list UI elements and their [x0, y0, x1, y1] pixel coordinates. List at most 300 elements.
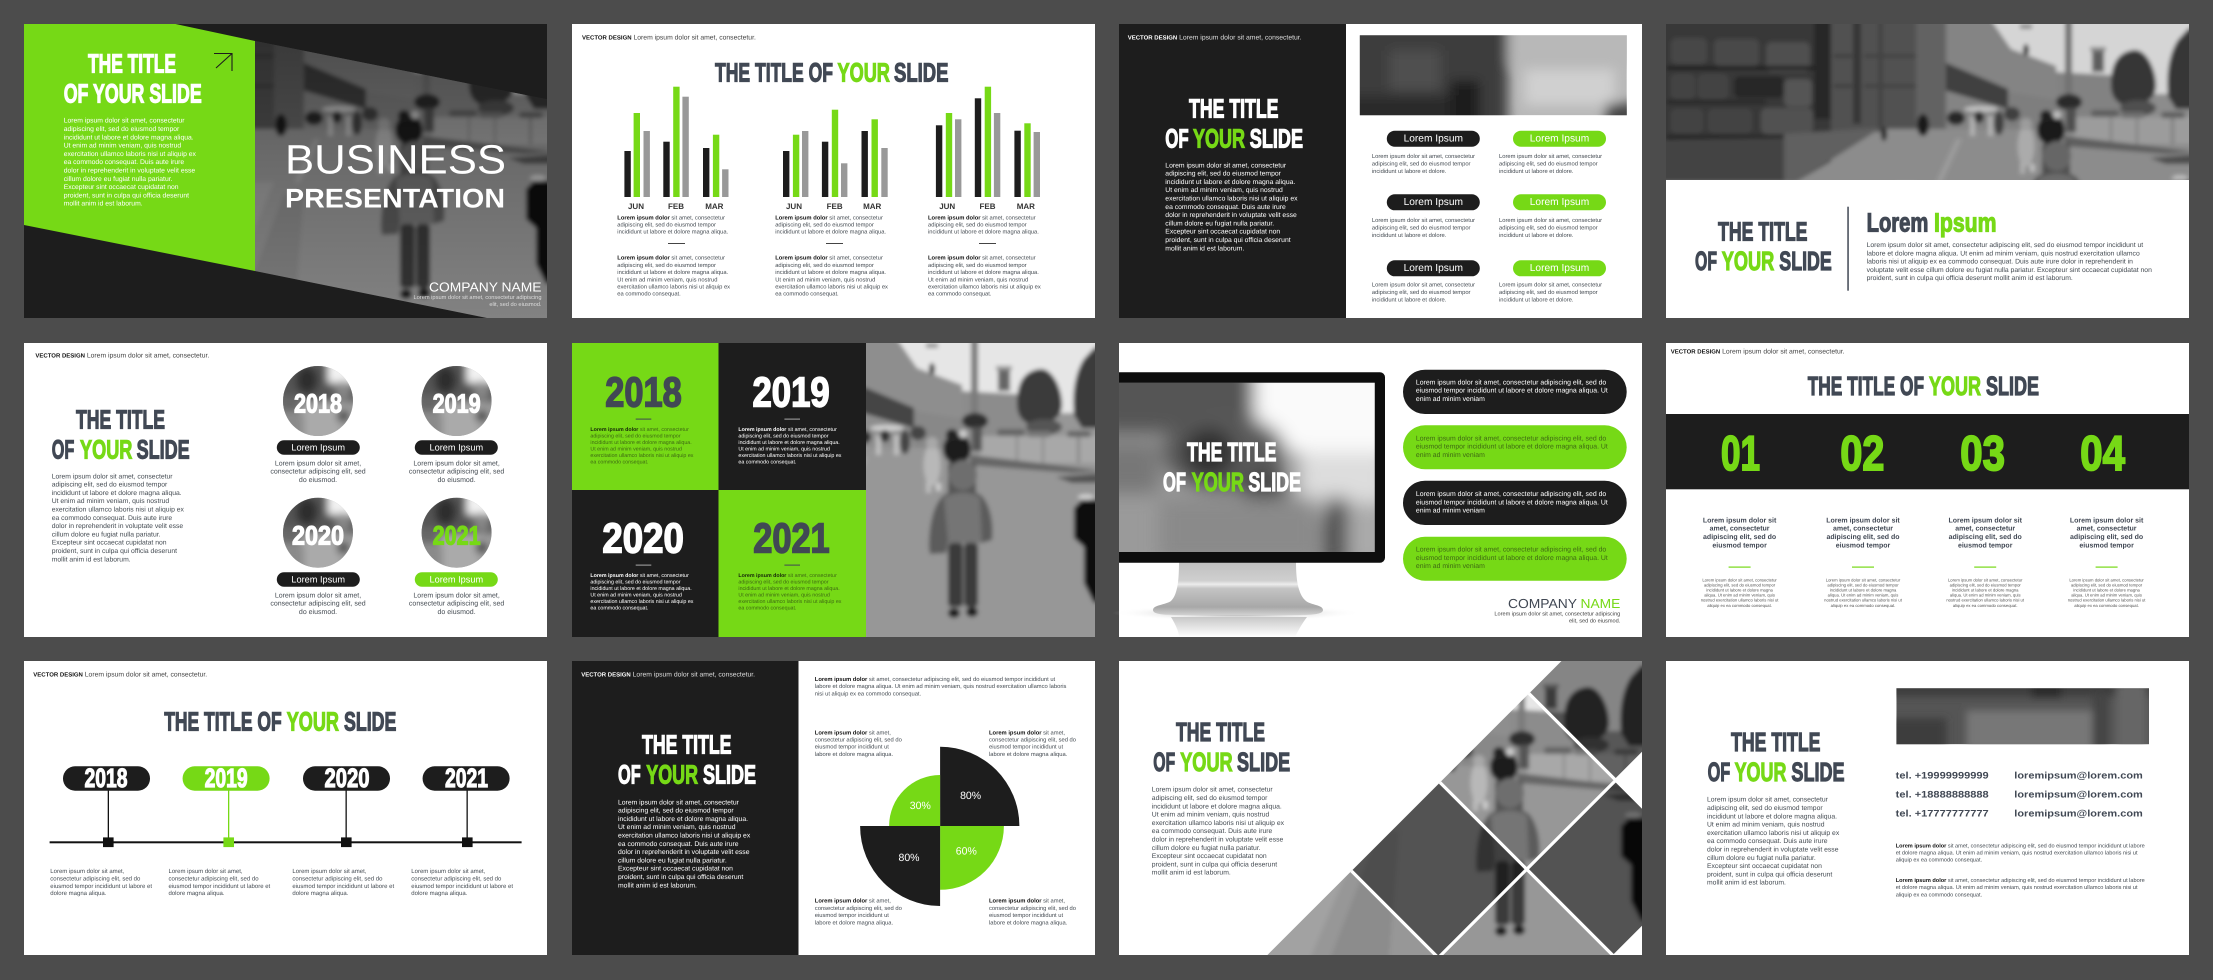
slide 9: timeline — [24, 661, 547, 955]
header note: VECTOR DESIGN Lorem ipsum dolor sit amet, consectetur. — [33, 672, 207, 679]
tile 2019: Ut enim ad minim veniam, quis nostrud — [738, 446, 830, 452]
body text: incididunt ut labore et dolore magna aliqua. — [52, 490, 182, 497]
chart 2 caption: incididunt ut labore et dolore magna aliqua. — [775, 269, 886, 276]
tile 2019: adipiscing elit, sed do eiusmod tempor — [738, 434, 829, 440]
title: SLIDE — [894, 58, 948, 88]
company name: Lorem ipsum dolor sit amet, consectetur adipiscing — [1494, 610, 1620, 617]
body text: Excepteur sint occaecat cupidatat non — [52, 540, 167, 547]
column 1 — [1701, 516, 1779, 608]
chart 2 caption — [775, 214, 888, 298]
body text: ea commodo consequat. Duis aute irure — [1707, 838, 1828, 845]
milestone 2019: 2019 — [205, 763, 248, 793]
note bottom left: consectetur adipiscing elit, sed do — [815, 905, 902, 912]
body text: adipiscing elit, sed do eiusmod tempor — [64, 126, 180, 133]
radial pie chart — [860, 747, 1019, 906]
column 2: Lorem ipsum dolor sit amet, consectetur — [1826, 577, 1901, 582]
chart 2 caption: adipiscing elit, sed do eiusmod tempor — [775, 222, 874, 228]
dark side panel: THE TITLE — [1189, 93, 1278, 123]
tile 2018: ea commodo consequat. — [590, 460, 648, 466]
column 3: eiusmod tempor — [1958, 542, 2013, 550]
tile 2019: Lorem ipsum dolor sit amet, consectetur — [738, 427, 837, 433]
body text: proident, sunt in culpa qui officia deserunt — [1707, 871, 1832, 878]
body text: exercitation ullamco laboris nisi ut aliquip ex — [64, 151, 197, 158]
year 2021 item: consectetur adipiscing elit, sed — [409, 600, 504, 608]
title: THE TITLE — [1718, 216, 1808, 246]
title — [1708, 727, 1845, 787]
chart 1 caption: incididunt ut labore et dolore magna aliqua. — [617, 269, 729, 276]
slide 8: numbered band — [1666, 343, 2189, 637]
title: THE TITLE OF — [1808, 371, 1924, 401]
dark side panel: Excepteur sint occaecat cupidatat non — [1165, 229, 1280, 236]
column 3 — [1946, 516, 2025, 608]
year 2018 item: Lorem Ipsum — [291, 442, 345, 452]
slide 11: diamond photo collage — [1119, 661, 1642, 955]
note bottom left: eiusmod tempor incididunt ut — [815, 912, 889, 919]
pill 3 — [1403, 481, 1627, 525]
title: SLIDE — [1779, 246, 1832, 276]
note top left: Lorem ipsum dolor sit amet, — [815, 730, 891, 736]
body text: proident, sunt in culpa qui officia deserunt — [1152, 861, 1277, 868]
column 3: aliquip ex ea commodo consequat. — [1953, 603, 2018, 608]
body text: Ut enim ad minim veniam, quis nostrud — [52, 498, 169, 505]
slide 7: monitor and pills — [1099, 343, 1642, 637]
contact emails: loremipsum@lorem.com — [2014, 790, 2143, 801]
body text: exercitation ullamco laboris nisi ut aliquip ex — [1152, 820, 1285, 827]
icon: monitor — [1099, 363, 1394, 637]
pill 4: Lorem ipsum dolor sit amet, consectetur adipiscing elit, sed do — [1416, 547, 1606, 554]
heading: presentation: PRESENTATION — [285, 184, 505, 214]
dark side panel: mollit anim id est laborum. — [1165, 245, 1244, 252]
title: YOUR — [287, 706, 339, 736]
body text: ea commodo consequat. Duis aute irure — [64, 159, 184, 166]
body text: proident, sunt in culpa qui officia deserunt — [52, 548, 177, 555]
company name: COMPANY — [1508, 596, 1577, 611]
photo collage — [1268, 661, 1642, 955]
title: SLIDE — [1791, 757, 1845, 787]
pill row 3: incididunt ut labore et dolore. — [1372, 296, 1447, 303]
text block 1: et dolore magna aliqua. Ut enim ad minim veniam, quis nostrud exercitation ullamco laboris nisi ut — [1896, 850, 2138, 856]
chart 1 caption: incididunt ut labore et dolore magna aliqua. — [617, 229, 729, 236]
dark side panel: dolor in reprehenderit in voluptate velit esse — [1165, 212, 1297, 219]
year 2019 item: consectetur adipiscing elit, sed — [409, 468, 504, 476]
pill 2: enim ad minim veniam — [1416, 452, 1485, 459]
company name: NAME — [1580, 596, 1621, 611]
tile 2018: 2018 — [605, 369, 682, 416]
column 4 — [2068, 516, 2146, 608]
timeline text 4: dolore magna aliqua. — [411, 890, 468, 897]
slide 3: dark side panel with pills — [1119, 15, 1648, 318]
dark side panel: incididunt ut labore et dolore magna aliqua. — [1165, 179, 1295, 186]
body text: exercitation ullamco laboris nisi ut aliquip ex — [1707, 830, 1840, 837]
title: SLIDE — [1237, 747, 1290, 777]
pill 4 — [1403, 537, 1627, 581]
pill row 1: incididunt ut labore et dolore. — [1372, 168, 1447, 175]
tile 2021: incididunt ut labore et dolore magna aliqua. — [738, 586, 840, 592]
contact phones: tel. +18888888888 — [1896, 790, 1989, 801]
timeline text 3: eiusmod tempor incididunt ut labore et — [292, 883, 394, 890]
chart 1 caption — [617, 214, 730, 298]
body text: Ut enim ad minim veniam, quis nostrud — [64, 143, 181, 150]
pill row 2: Lorem ipsum dolor sit amet, consectetur — [1372, 217, 1475, 224]
column 4: Lorem ipsum dolor sit amet, consectetur — [2069, 577, 2144, 582]
timeline text 2: dolore magna aliqua. — [168, 890, 225, 897]
pill row 2: incididunt ut labore et dolore. — [1499, 232, 1574, 239]
tile 2020: 2020 — [602, 515, 684, 562]
timeline text 1: Lorem ipsum dolor sit amet, — [50, 868, 125, 875]
note bottom left: labore et dolore magna aliqua. — [815, 919, 894, 926]
bar chart 2 — [783, 110, 888, 211]
dark side panel: SLIDE — [1250, 123, 1303, 153]
timeline text 3: Lorem ipsum dolor sit amet, — [292, 868, 367, 875]
body text: incididunt ut labore et dolore magna aliqua. — [1152, 803, 1282, 810]
bar chart 1: JUN — [628, 202, 644, 211]
milestone 2018 — [63, 763, 150, 847]
year 2019 item: do eiusmod. — [438, 476, 476, 484]
timeline axis — [50, 841, 522, 843]
dark side panel: SLIDE — [703, 760, 756, 790]
year 2020 item: 2020 — [292, 520, 344, 550]
tile 2020: exercitation ullamco laboris nisi ut aliquip ex — [590, 599, 694, 605]
title: OF — [1708, 757, 1730, 787]
column 3: adipiscing elit, sed do eiusmod tempor — [1950, 582, 2021, 587]
dark side panel: Lorem ipsum dolor sit amet, consectetur — [1165, 162, 1287, 169]
company name: COMPANY NAME — [429, 280, 542, 295]
cover photo — [255, 41, 547, 318]
title: OF — [52, 434, 74, 464]
tile 2020: incididunt ut labore et dolore magna aliqua. — [590, 586, 692, 592]
pill row 1 — [1372, 131, 1606, 175]
title: THE TITLE — [76, 404, 165, 434]
chart 3 caption: adipiscing elit, sed do eiusmod tempor — [928, 222, 1027, 228]
subheading: Ipsum — [1934, 207, 1996, 237]
body text: adipiscing elit, sed do eiusmod tempor — [1152, 795, 1268, 802]
tile 2018: adipiscing elit, sed do eiusmod tempor — [590, 434, 681, 440]
dark side panel: ea commodo consequat. Duis aute irure — [618, 841, 739, 848]
title: YOUR — [1180, 747, 1233, 777]
bar chart 3: JUN — [939, 202, 955, 211]
chart 3 caption: incididunt ut labore et dolore magna aliqua. — [928, 229, 1039, 236]
pill row 3: adipiscing elit, sed do eiusmod tempor — [1372, 289, 1471, 296]
note top right: Lorem ipsum dolor sit amet, — [989, 730, 1065, 736]
timeline text 1: consectetur adipiscing elit, sed do — [50, 875, 141, 882]
dark side panel: Ut enim ad minim veniam, quis nostrud — [618, 824, 736, 831]
pill row 3: Lorem Ipsum — [1404, 263, 1463, 274]
header note: VECTOR DESIGN Lorem ipsum dolor sit amet, consectetur. — [582, 35, 756, 42]
bar chart 1 — [624, 87, 728, 211]
year 2020 item: do eiusmod. — [299, 608, 337, 616]
body text: ea commodo consequat. Duis aute irure — [52, 515, 172, 522]
body text: Lorem ipsum dolor sit amet, consectetur — [1152, 787, 1273, 794]
dark side panel: Ut enim ad minim veniam, quis nostrud — [1165, 187, 1283, 194]
year 2019 item: 2019 — [433, 389, 481, 419]
company name: Lorem ipsum dolor sit amet, consectetur adipiscing — [413, 294, 542, 301]
dark side panel: ea commodo consequat. Duis aute irure — [1165, 204, 1286, 211]
header note: VECTOR DESIGN Lorem ipsum dolor sit amet, consectetur. — [1671, 349, 1845, 356]
company name — [1494, 596, 1621, 624]
column 4: amet, consectetur — [2077, 526, 2137, 533]
body text: mollit anim id est laborum. — [64, 201, 143, 208]
tile 2020: ea commodo consequat. — [590, 606, 648, 612]
column 4: incididunt ut labore et dolore magna — [2073, 588, 2141, 592]
body text: cillum dolore eu fugiat nulla pariatur. — [52, 531, 161, 538]
slide 1: business presentation cover — [24, 24, 547, 318]
body text: mollit anim id est laborum. — [1707, 880, 1786, 887]
tile 2021: exercitation ullamco laboris nisi ut aliquip ex — [738, 599, 842, 605]
vertical divider — [1847, 207, 1849, 291]
column 3: aliqua. Ut enim ad minim veniam, quis — [1950, 593, 2021, 598]
tile 2020 — [572, 490, 718, 637]
milestone 2020 — [303, 763, 390, 847]
note bottom right: Lorem ipsum dolor sit amet, — [989, 899, 1065, 905]
icon: monitor: SLIDE — [1248, 467, 1301, 497]
body text: mollit anim id est laborum. — [52, 556, 131, 563]
pill 2: Lorem ipsum dolor sit amet, consectetur adipiscing elit, sed do — [1416, 435, 1606, 442]
title: YOUR — [80, 434, 132, 464]
year 2019 item: Lorem ipsum dolor sit amet, — [413, 459, 500, 467]
title: YOUR — [1929, 371, 1981, 401]
milestone 2019 — [183, 763, 270, 847]
body text: Excepteur sint occaecat cupidatat non — [64, 184, 179, 191]
title: SLIDE — [1986, 371, 2039, 401]
pill 4: enim ad minim veniam — [1416, 563, 1485, 570]
pill row 1: adipiscing elit, sed do eiusmod tempor — [1372, 160, 1471, 168]
body text: mollit anim id est laborum. — [1152, 870, 1231, 877]
tile 2021: ea commodo consequat. — [738, 606, 796, 612]
year 2021 item: Lorem Ipsum — [429, 574, 483, 584]
dark number band: 01 — [1721, 427, 1760, 481]
title — [1695, 216, 1832, 276]
note top left: labore et dolore magna aliqua. — [815, 751, 894, 758]
dark side panel: YOUR — [646, 760, 698, 790]
pill row 1: incididunt ut labore et dolore. — [1499, 168, 1574, 175]
timeline text 1: dolore magna aliqua. — [50, 890, 107, 897]
text block 1: Lorem ipsum dolor sit amet, consectetur adipiscing elit, sed do eiusmod tempor incididunt ut labore — [1896, 843, 2145, 849]
body text: exercitation ullamco laboris nisi ut aliquip ex — [52, 506, 185, 514]
dark side panel: VECTOR DESIGN Lorem ipsum dolor sit amet, consectetur. — [1128, 35, 1302, 42]
bar chart 3: FEB — [980, 202, 996, 211]
year 2020 item: Lorem Ipsum — [291, 574, 345, 584]
pill row 3: adipiscing elit, sed do eiusmod tempor — [1499, 289, 1598, 296]
milestone 2018: 2018 — [84, 763, 128, 793]
pill 2: eiusmod tempor incididunt ut labore et dolore magna aliqua. Ut — [1416, 444, 1608, 451]
pill 3: eiusmod tempor incididunt ut labore et dolore magna aliqua. Ut — [1416, 499, 1608, 506]
chart 2 caption: exercitation ullamco laboris nisi ut aliquip ex — [775, 284, 888, 290]
contact emails: loremipsum@lorem.com — [2014, 809, 2143, 820]
chart 3 caption: Ut enim ad minim veniam, quis nostrud — [928, 276, 1028, 283]
title: SLIDE — [137, 434, 190, 464]
bar chart 2: FEB — [827, 202, 843, 211]
column 2: aliqua. Ut enim ad minim veniam, quis — [1828, 593, 1898, 598]
pill row 3: incididunt ut labore et dolore. — [1499, 296, 1574, 303]
column 2: adipiscing elit, sed do eiusmod tempor — [1827, 582, 1899, 587]
title: OF — [1153, 747, 1175, 777]
timeline text 4: consectetur adipiscing elit, sed do — [411, 875, 502, 882]
column 4: Lorem ipsum dolor sit — [2070, 516, 2144, 524]
milestone 2021: 2021 — [445, 763, 488, 793]
dark side panel: mollit anim id est laborum. — [618, 882, 697, 889]
pill 2 — [1403, 425, 1627, 469]
radial pie chart: 80% — [960, 790, 981, 802]
year 2021 item: 2021 — [433, 520, 481, 550]
body text: dolor in reprehenderit in voluptate velit esse — [1152, 836, 1284, 844]
company name: elit, sed do eiusmod. — [489, 301, 542, 308]
chart 3 caption: Lorem ipsum dolor sit amet, consectetur — [928, 256, 1036, 262]
column 1: Lorem ipsum dolor sit amet, consectetur — [1702, 577, 1777, 582]
tile 2018: exercitation ullamco laboris nisi ut aliquip ex — [590, 453, 694, 459]
body text: Excepteur sint occaecat cupidatat non — [1152, 853, 1267, 860]
tile 2020: Ut enim ad minim veniam, quis nostrud — [590, 592, 682, 598]
bar chart 1: MAR — [705, 202, 724, 211]
note top left: eiusmod tempor incididunt ut — [815, 744, 889, 751]
dark number band — [1666, 414, 2189, 489]
dark side panel: adipiscing elit, sed do eiusmod tempor — [1165, 171, 1282, 178]
note top left: consectetur adipiscing elit, sed do — [815, 736, 902, 744]
contact phones: tel. +19999999999 — [1896, 771, 1989, 782]
year 2021 item: do eiusmod. — [438, 608, 476, 616]
body text: dolor in reprehenderit in voluptate velit esse — [1707, 846, 1839, 854]
title: SLIDE — [344, 706, 396, 736]
company name — [413, 280, 542, 308]
year 2021 item — [409, 493, 504, 616]
body text: Lorem ipsum dolor sit amet, consectetur — [52, 473, 173, 480]
heading: business: BUSINESS — [285, 136, 506, 182]
chart 1 caption: Lorem ipsum dolor sit amet, consectetur — [617, 256, 725, 262]
column 2: aliquip ex ea commodo consequat. — [1831, 603, 1895, 608]
dark side panel: OF — [1165, 123, 1189, 153]
column 2 — [1824, 516, 1903, 608]
year 2020 item — [270, 493, 366, 616]
column 1: adipiscing elit, sed do eiusmod tempor — [1704, 582, 1776, 587]
dark side panel: incididunt ut labore et dolore magna aliqua. — [618, 816, 748, 823]
pill row 2: incididunt ut labore et dolore. — [1372, 232, 1447, 239]
contact emails — [2014, 771, 2143, 820]
text block 2: aliquip ex ea commodo consequat. — [1896, 891, 1983, 898]
intro text: nisi ut aliquip ex ea commodo consequat. — [815, 690, 922, 697]
body text: Ut enim ad minim veniam, quis nostrud — [1152, 812, 1270, 819]
title: YOUR — [838, 58, 890, 88]
chart 1 caption: Ut enim ad minim veniam, quis nostrud — [617, 276, 718, 283]
chart 3 caption: incididunt ut labore et dolore magna aliqua. — [928, 269, 1039, 276]
tile 2018: incididunt ut labore et dolore magna aliqua. — [590, 440, 692, 446]
pill row 3: Lorem ipsum dolor sit amet, consectetur — [1372, 281, 1475, 288]
tile 2021: 2021 — [753, 515, 830, 562]
dark number band: 03 — [1960, 427, 2005, 481]
dark side panel: adipiscing elit, sed do eiusmod tempor — [618, 808, 734, 815]
year 2018 item — [270, 361, 366, 484]
pill row 1: Lorem Ipsum — [1530, 134, 1589, 145]
body text: proident, sunt in culpa qui officia deserunt — [64, 192, 189, 199]
dark side panel: proident, sunt in culpa qui officia deserunt — [618, 874, 743, 881]
title: YOUR — [1722, 246, 1774, 276]
chart 1 caption: Lorem ipsum dolor sit amet, consectetur — [617, 215, 725, 221]
column 1: eiusmod tempor — [1712, 542, 1767, 550]
dark side panel — [572, 661, 798, 955]
body text: Excepteur sint occaecat cupidatat non — [1707, 863, 1822, 870]
body text: ea commodo consequat. Duis aute irure — [1152, 828, 1273, 835]
column 4: nostrud exercitation ullamco laboris nisi ut — [2068, 598, 2146, 603]
tile 2019 — [718, 343, 866, 490]
body text: adipiscing elit, sed do eiusmod tempor — [1707, 805, 1823, 812]
street photo — [1666, 24, 2189, 180]
timeline text 4: Lorem ipsum dolor sit amet, — [411, 868, 486, 875]
year 2018 item: consectetur adipiscing elit, sed — [270, 468, 366, 476]
bar chart 1: FEB — [668, 202, 684, 211]
body text: proident, sunt in culpa qui officia deserunt mollit anim id est laborum. — [1867, 275, 2073, 282]
note bottom left: Lorem ipsum dolor sit amet, — [815, 899, 891, 905]
tile 2021: adipiscing elit, sed do eiusmod tempor — [738, 580, 829, 586]
year 2020 item: Lorem ipsum dolor sit amet, — [275, 591, 361, 599]
dark side panel: THE TITLE — [642, 729, 732, 759]
dark side panel: proident, sunt in culpa qui officia deserunt — [1165, 237, 1291, 244]
column 3: Lorem ipsum dolor sit amet, consectetur — [1948, 577, 2023, 582]
chart 1 caption: ea commodo consequat. — [617, 291, 681, 298]
pill 1: eiusmod tempor incididunt ut labore et dolore magna aliqua. Ut — [1416, 388, 1608, 395]
column 1: incididunt ut labore et dolore magna — [1706, 588, 1774, 592]
body text: adipiscing elit, sed do eiusmod tempor — [52, 482, 168, 489]
body text: dolor in reprehenderit in voluptate velit esse — [64, 168, 195, 174]
body text: Lorem ipsum dolor sit amet, consectetur adipiscing elit, sed do eiusmod tempor incididunt ut — [1867, 242, 2143, 249]
milestone 2020: 2020 — [324, 763, 370, 793]
column 3: nostrud exercitation ullamco laboris nisi ut — [1946, 598, 2025, 603]
year 2018 item: do eiusmod. — [299, 476, 337, 484]
body text: laboris nisi ut aliquip ex ea commodo consequat. Duis aute irure dolor in reprehenderit in — [1867, 259, 2133, 266]
body text: labore et dolore magna aliqua. Ut enim ad minim veniam, quis nostrud exercitation ullamco — [1867, 250, 2140, 257]
timeline text 4: eiusmod tempor incididunt ut labore et — [411, 883, 513, 890]
column 2: Lorem ipsum dolor sit — [1826, 516, 1900, 524]
dark number band: 02 — [1840, 427, 1884, 481]
note top right: labore et dolore magna aliqua. — [989, 751, 1068, 758]
body text: cillum dolore eu fugiat nulla pariatur. — [1152, 845, 1261, 852]
note bottom right: labore et dolore magna aliqua. — [989, 919, 1068, 926]
bar chart 2: JUN — [786, 202, 802, 211]
timeline text 2: consectetur adipiscing elit, sed do — [168, 875, 259, 882]
chart 3 caption: exercitation ullamco laboris nisi ut aliquip ex — [928, 284, 1041, 290]
column 1: aliquip ex ea commodo consequat. — [1707, 603, 1772, 608]
year 2018 item: 2018 — [294, 389, 342, 419]
column 2: eiusmod tempor — [1836, 542, 1891, 550]
column 1: adipiscing elit, sed do — [1703, 533, 1776, 541]
timeline text 2: Lorem ipsum dolor sit amet, — [168, 868, 243, 875]
tile 2019: ea commodo consequat. — [738, 460, 796, 466]
radial pie chart: 30% — [910, 800, 931, 812]
tile 2021 — [718, 490, 866, 637]
body text: cillum dolore eu fugiat nulla pariatur. — [64, 176, 173, 183]
tile 2021: Ut enim ad minim veniam, quis nostrud — [738, 592, 830, 598]
icon: arrow — [214, 54, 232, 71]
pill row 1: Lorem ipsum dolor sit amet, consectetur — [1499, 153, 1602, 160]
body text: Lorem ipsum dolor sit amet, consectetur — [64, 118, 185, 125]
tile 2020: adipiscing elit, sed do eiusmod tempor — [590, 580, 681, 586]
title: OF — [1695, 246, 1717, 276]
note bottom right: consectetur adipiscing elit, sed do — [989, 905, 1076, 912]
column 2: incididunt ut labore et dolore magna — [1830, 588, 1897, 592]
title: THE TITLE OF — [164, 706, 282, 736]
note bottom right: eiusmod tempor incididunt ut — [989, 912, 1064, 919]
column 4: aliqua. Ut enim ad minim veniam, quis — [2071, 593, 2142, 598]
body text: incididunt ut labore et dolore magna aliqua. — [64, 134, 194, 141]
text block 1: aliquip ex ea commodo consequat. — [1896, 857, 1983, 864]
pill row 1: Lorem Ipsum — [1404, 134, 1463, 145]
column 3: amet, consectetur — [1955, 526, 2015, 533]
column 3: Lorem ipsum dolor sit — [1948, 516, 2023, 524]
chart 1 caption: exercitation ullamco laboris nisi ut aliquip ex — [617, 284, 730, 290]
blurred image — [1360, 35, 1627, 116]
tile 2018: Ut enim ad minim veniam, quis nostrud — [590, 446, 682, 452]
pill 4: eiusmod tempor incididunt ut labore et dolore magna aliqua. Ut — [1416, 555, 1608, 562]
icon: monitor: OF — [1163, 467, 1186, 497]
company name: elit, sed do eiusmod. — [1569, 617, 1621, 624]
pill 1: Lorem ipsum dolor sit amet, consectetur adipiscing elit, sed do — [1416, 379, 1606, 386]
